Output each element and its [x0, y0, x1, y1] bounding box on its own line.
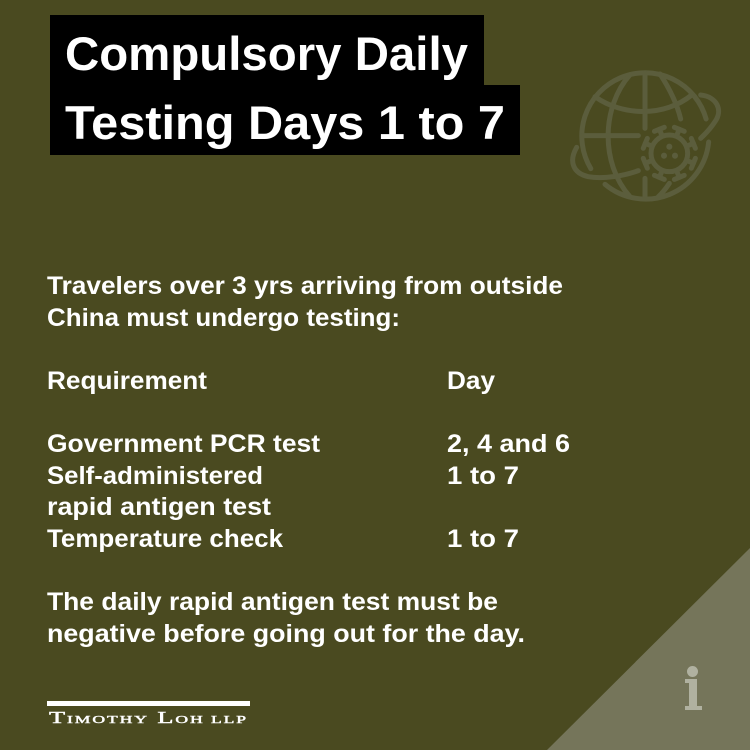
- text block: note: The daily rapid antigen test must be: [47, 588, 498, 616]
- table: requirements by day: [47, 367, 570, 553]
- icon: info: [685, 666, 702, 710]
- text block: note: [47, 588, 525, 648]
- text block: intro: [47, 272, 563, 332]
- logo: Timothy Loh LLP: T IMOTHY L OH LLP: [49, 708, 248, 727]
- text block: intro: Travelers over 3 yrs arriving from outside: [47, 272, 563, 300]
- table: requirements by day: 2, 4 and 6: [447, 430, 570, 458]
- text block: intro: China must undergo testing:: [47, 304, 400, 332]
- table: requirements by day: 1 to 7: [447, 525, 519, 553]
- logo: Timothy Loh LLP: [47, 701, 250, 727]
- table: requirements by day: Government PCR test: [47, 430, 321, 458]
- table: requirements by day: Self-administered: [47, 462, 263, 490]
- text block: note: negative before going out for the day.: [47, 620, 525, 648]
- table: requirements by day: Day: [447, 367, 495, 395]
- title: Testing Days 1 to 7: [65, 96, 505, 149]
- title: [50, 15, 520, 155]
- table: requirements by day: Temperature check: [47, 525, 283, 553]
- title: Compulsory Daily: [65, 27, 468, 80]
- table: requirements by day: Requirement: [47, 367, 208, 395]
- corner triangle with info icon: [547, 548, 750, 750]
- icon: globe with virus: [573, 73, 719, 199]
- table: requirements by day: rapid antigen test: [47, 493, 272, 521]
- table: requirements by day: 1 to 7: [447, 462, 519, 490]
